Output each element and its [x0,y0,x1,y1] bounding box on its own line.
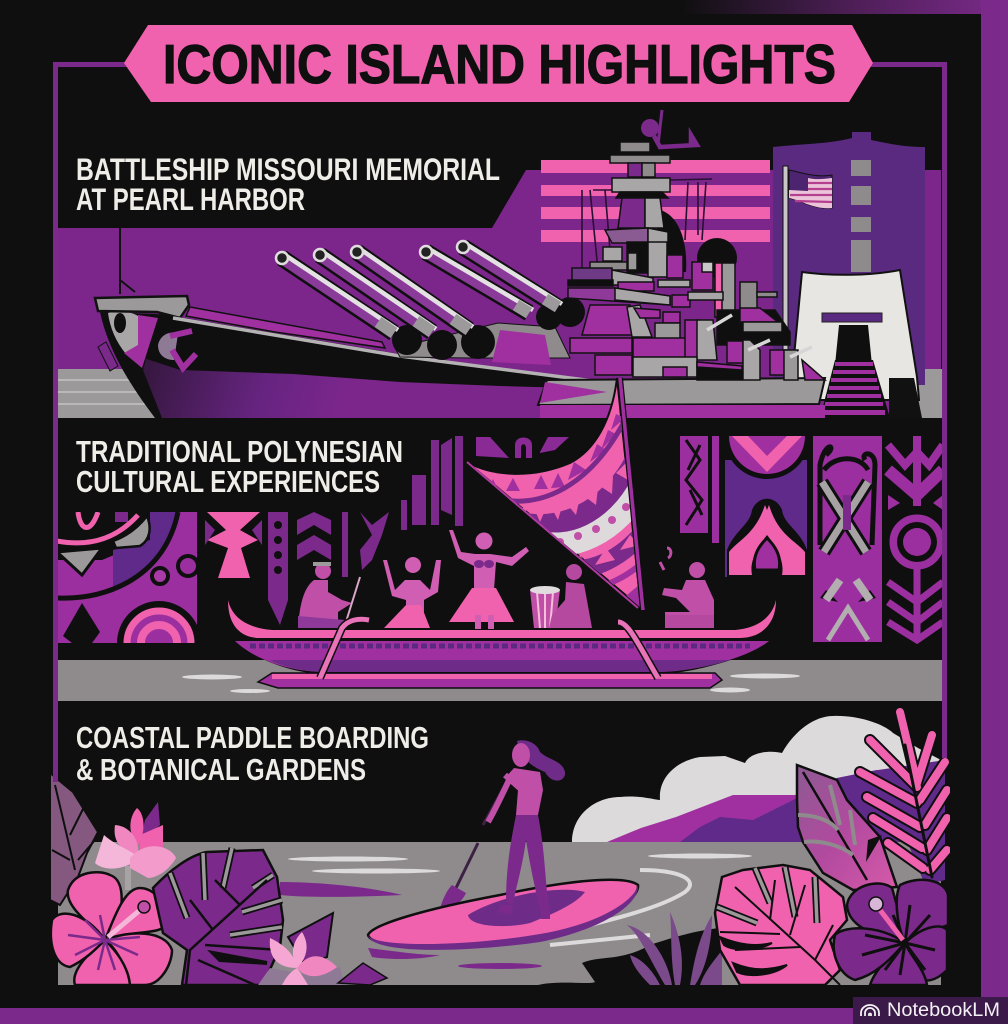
rigging lines [582,179,712,270]
heading: battleship: AT PEARL HARBOR [76,181,305,217]
stern gray hull [538,378,825,405]
mountain [607,770,878,842]
feather leaf leaflets [860,712,947,877]
outrigger arms [320,619,658,678]
mast and radar [641,110,697,147]
pink orchid top left [95,802,176,890]
icon: notebooklm logo [861,1005,879,1016]
outrigger float [258,673,722,688]
left gray leaf [50,773,98,905]
sail dots [556,503,630,546]
canoe hull [228,598,776,674]
title: ICONIC ISLAND HIGHLIGHTS [163,33,836,95]
magenta base band [540,405,825,418]
heading: paddle boarding: COASTAL PADDLE BOARDING [76,720,429,755]
black domes behind tower [650,210,737,278]
sail triangle row two [522,464,627,522]
mountain shade [680,770,902,842]
heading: polynesian: CULTURAL EXPERIENCES [76,464,380,499]
left monstera leaf [153,848,283,985]
heading: polynesian: TRADITIONAL POLYNESIAN [76,434,403,469]
right hibiscus [834,880,948,985]
secondary guns [707,315,812,357]
paddle board [368,880,638,950]
water right [917,369,942,418]
purple water shadows [280,882,542,969]
panel: battleship missouri [57,110,942,418]
water highlights [182,674,800,693]
anchor gear [158,331,196,368]
heading: paddle boarding [76,720,429,787]
person: dancer left [383,557,441,628]
person: drummer [549,564,592,628]
heading: battleship [76,151,500,217]
left hibiscus [51,872,172,985]
drum [530,586,560,628]
notebooklm badge [853,997,1008,1024]
person: seated man with paddle [298,562,360,628]
sail [467,378,645,612]
deck railing [186,307,385,348]
superstructure [568,142,825,380]
fern right [627,912,722,985]
person: main dancer [449,530,529,629]
tribal pattern columns left [205,512,389,625]
frame lines [53,62,947,782]
tribal pattern columns right [680,436,948,644]
paddler woman [488,740,565,919]
flag and pole [783,166,832,356]
gun turrets [392,297,585,365]
pink monstera leaf [715,865,847,985]
heading: battleship: BATTLESHIP MISSOURI MEMORIAL [76,151,500,187]
sail triangle row one [487,414,625,492]
heading: polynesian [76,434,403,499]
board wake [550,870,690,945]
person: ukulele player [660,548,714,628]
tribal pattern left [57,512,198,643]
memorial tower [773,132,925,385]
main gun barrels [276,241,562,333]
water reflections [288,854,752,874]
panel: polynesian culture [57,378,943,701]
flagstaff at bow [120,228,135,294]
ship hull [95,296,825,418]
tribal pattern columns upper middle [401,436,463,530]
water left [57,369,162,418]
black notch at lower water [538,928,720,985]
paddle [440,785,504,906]
panel background [58,170,941,418]
outrigger highlight [272,674,712,679]
heading: paddle boarding: & BOTANICAL GARDENS [76,752,366,787]
lower left flower and leaf [258,913,387,985]
water [57,660,942,701]
sunset stripes [541,160,770,242]
title banner [124,25,873,102]
cloud [572,716,941,842]
tribal motif above sail [476,437,569,458]
panel: paddle boarding and gardens [50,712,948,985]
striped leaf upper right [797,765,897,890]
feather leaf background [878,760,945,885]
panel divider black band [58,418,942,660]
watermark text: NotebookLM [887,1000,1000,1021]
memorial monument [793,270,922,418]
lower water [58,842,941,985]
